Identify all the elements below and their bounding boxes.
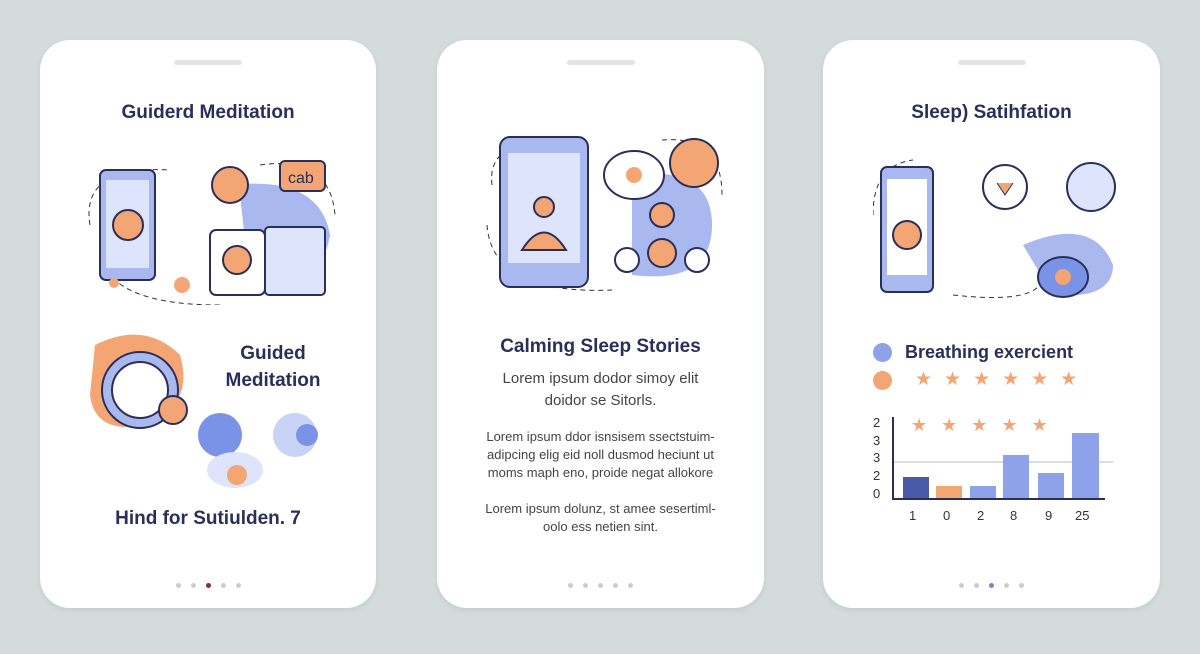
pagination dots — [568, 583, 633, 588]
x-axis labels: 25 — [1075, 508, 1089, 523]
bar chart — [873, 415, 1113, 501]
heading: guided meditation: Guiderd Meditation — [121, 102, 295, 123]
pagination dots — [176, 583, 241, 588]
legend: Breathing exercient — [905, 342, 1073, 362]
x-axis labels: 2 — [977, 508, 984, 523]
legend: ★★★★★★ — [915, 369, 1089, 390]
text: guided meditation — [226, 343, 320, 391]
body paragraph: Lorem ipsum ddor isnsisem ssectstuim- — [486, 429, 715, 444]
illustration 1 — [88, 160, 336, 305]
x-axis labels: 1 — [909, 508, 916, 523]
body paragraph: adipcing elig eid noll dusmod heciunt ut — [487, 447, 714, 462]
bar chart: 2 — [873, 415, 880, 430]
heading: calming sleep stories: Calming Sleep Stories — [500, 336, 701, 357]
subtitle: doidor se Sitorls. — [545, 392, 656, 409]
x-axis labels: 8 — [1010, 508, 1017, 523]
heading: sleep satisfaction: Sleep) Satihfation — [911, 102, 1072, 123]
card 2 — [437, 40, 764, 608]
body paragraph 2: oolo ess netien sint. — [543, 519, 658, 534]
text: guided meditation: Guided — [240, 343, 306, 364]
bar chart: ★★★★★ — [911, 415, 1062, 435]
illustration — [873, 160, 1116, 298]
illustration — [486, 136, 722, 291]
body paragraph 2: Lorem ipsum dolunz, st amee sesertiml- — [485, 501, 716, 516]
bar chart: 0 — [873, 486, 880, 501]
body paragraph: moms maph eno, proide negat allokore — [488, 465, 713, 480]
bar chart: 2 — [873, 468, 880, 483]
card 3 — [823, 40, 1160, 608]
subtitle: Lorem ipsum dodor simoy elit — [503, 370, 698, 387]
pagination dots — [959, 583, 1024, 588]
illustration 2 — [90, 334, 318, 488]
card 1 — [40, 40, 376, 608]
footer text: Hind for Sutiulden. 7 — [115, 508, 301, 529]
text: guided meditation: Meditation — [226, 370, 320, 391]
subtitle — [503, 370, 698, 409]
bar chart: 3 — [873, 433, 880, 448]
bar chart: 3 — [873, 450, 880, 465]
illustration 1: cab — [288, 170, 314, 187]
x-axis labels — [909, 508, 1089, 523]
x-axis labels: 9 — [1045, 508, 1052, 523]
x-axis labels: 0 — [943, 508, 950, 523]
body paragraph — [486, 429, 715, 480]
legend — [873, 342, 1089, 390]
body paragraph 2 — [485, 501, 716, 534]
